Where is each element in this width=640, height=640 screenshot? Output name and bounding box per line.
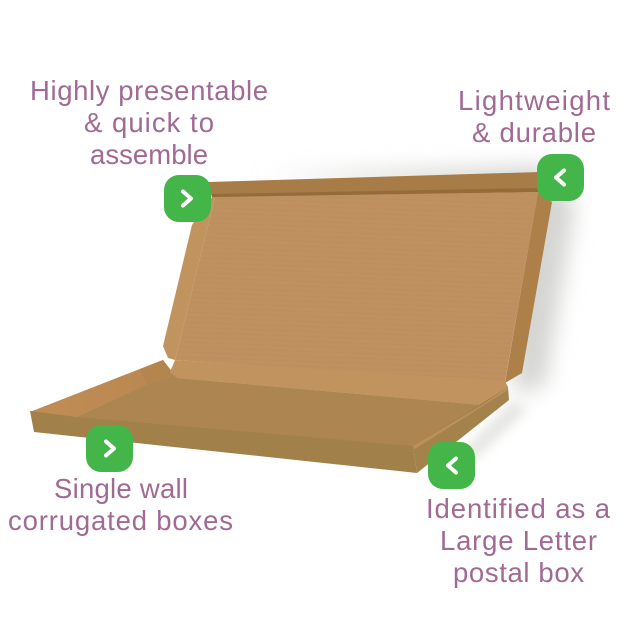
label text	[426, 493, 611, 588]
label text: & durable	[472, 117, 596, 148]
icon: right chevron badge	[164, 175, 211, 222]
lid corrugation	[175, 192, 538, 382]
left wall folded tab	[140, 360, 171, 385]
box floor	[77, 378, 482, 447]
hinge strip	[170, 360, 508, 405]
label text	[8, 473, 233, 536]
lid left flap	[163, 197, 215, 360]
icon: left chevron badge	[537, 154, 584, 201]
base underlay	[30, 360, 482, 447]
right wall top edge	[413, 387, 508, 449]
label text	[458, 85, 610, 148]
icon: left chevron badge	[428, 442, 475, 489]
label text: postal box	[453, 557, 584, 588]
icon: right chevron badge	[86, 425, 133, 472]
label text: Lightweight	[458, 85, 610, 116]
lid right flap	[505, 192, 552, 383]
front wall	[30, 411, 417, 473]
left wall inner	[30, 360, 171, 417]
callout: large letter	[426, 442, 611, 588]
label text: Single wall	[54, 473, 188, 504]
label text: Highly presentable	[30, 75, 268, 106]
label text	[30, 75, 268, 170]
label text: & quick to	[84, 107, 214, 138]
lid top flap	[208, 172, 540, 198]
box shadow	[262, 166, 575, 465]
callout: highly presentable	[30, 75, 268, 222]
callout: lightweight	[458, 85, 610, 201]
right wall	[413, 387, 509, 473]
label text: assemble	[90, 139, 208, 170]
label text: Large Letter	[440, 525, 597, 556]
lid panel	[175, 192, 538, 382]
lid top flap fold line	[212, 188, 539, 198]
label text: corrugated boxes	[8, 505, 233, 536]
label text: Identified as a	[426, 493, 611, 524]
cardboard box	[30, 172, 552, 473]
callout: single wall	[8, 425, 233, 536]
